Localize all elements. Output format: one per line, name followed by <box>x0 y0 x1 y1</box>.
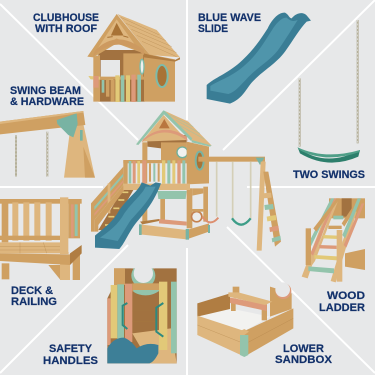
stairs <box>91 167 133 232</box>
heading: clubhouse with roof: WITH ROOF <box>35 23 97 35</box>
heading: wood ladder: LADDER <box>319 302 365 314</box>
heading: clubhouse with roof: CLUBHOUSE <box>33 12 99 24</box>
heading: two swings: TWO SWINGS <box>293 169 365 181</box>
heading: lower sandbox: SANDBOX <box>275 354 333 366</box>
heading: blue wave slide: BLUE WAVE <box>198 12 261 24</box>
heading: lower sandbox: LOWER <box>283 343 324 355</box>
heading: swing beam and hardware: & HARDWARE <box>10 96 84 108</box>
illustration: lower sandbox <box>197 282 293 357</box>
lower posts <box>142 187 208 228</box>
heading: clubhouse with roof <box>33 12 99 35</box>
illustration: clubhouse <box>87 14 180 102</box>
swings <box>202 162 251 225</box>
illustration: deck and railing <box>0 197 82 280</box>
heading: safety handles <box>43 343 98 367</box>
illustration: blue wave slide <box>207 13 311 104</box>
sandbox <box>139 219 210 240</box>
slide channel <box>100 187 156 241</box>
central playset <box>91 110 281 251</box>
heading: safety handles: HANDLES <box>43 355 98 367</box>
heading: swing beam and hardware: SWING BEAM <box>10 85 81 97</box>
heading: swing beam and hardware <box>10 85 84 108</box>
roof <box>136 110 212 147</box>
heading: lower sandbox <box>275 343 333 366</box>
heading: blue wave slide: SLIDE <box>198 23 228 35</box>
heading: safety handles: SAFETY <box>49 343 93 355</box>
heading: deck and railing: DECK & <box>11 285 53 297</box>
illustration: safety handles <box>107 262 177 363</box>
heading: wood ladder: WOOD <box>327 290 365 302</box>
swing beam <box>198 157 281 251</box>
railing <box>123 160 190 190</box>
clubhouse walls <box>142 135 209 184</box>
heading: blue wave slide <box>198 12 261 35</box>
bench <box>159 219 187 226</box>
illustration: wood ladder <box>302 198 365 282</box>
illustration: swing beam <box>0 111 95 178</box>
illustration: swing with chains <box>298 20 360 163</box>
slide <box>95 182 161 249</box>
heading: deck and railing <box>11 285 57 308</box>
awning <box>157 191 187 199</box>
heading: wood ladder <box>319 290 365 314</box>
heading: deck and railing: RAILING <box>11 296 57 308</box>
